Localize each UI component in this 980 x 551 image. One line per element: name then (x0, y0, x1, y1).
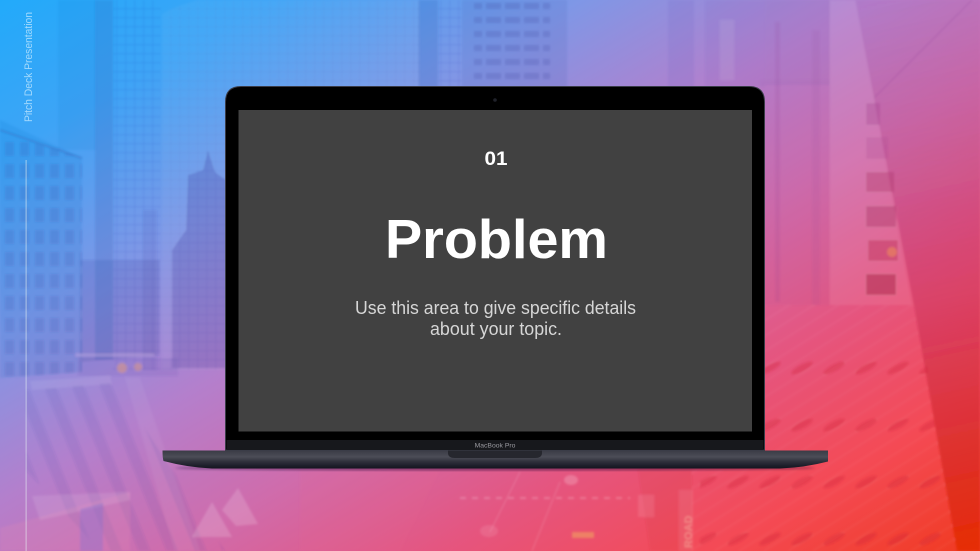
vertical rule (26, 160, 27, 551)
description: about your topic. (430, 318, 562, 339)
side label: Pitch Deck Presentation (23, 12, 35, 122)
lower left diagonal roof (26, 378, 225, 551)
description (355, 297, 636, 339)
dark silhouette tower (172, 150, 226, 368)
low street block (30, 354, 178, 390)
laptop lid (226, 86, 764, 450)
right diagonal panel (855, 0, 980, 551)
laptop (162, 86, 828, 471)
left building (0, 120, 82, 378)
section number: 01 (484, 149, 508, 170)
webcam (493, 98, 497, 102)
laptop shadow (175, 465, 815, 471)
rooftops (192, 488, 258, 537)
centre top building (462, 0, 567, 87)
laptop screen (238, 110, 752, 432)
right pale tower (830, 0, 912, 305)
lower bezel (226, 440, 764, 450)
left tower (58, 0, 160, 362)
street scene (300, 470, 695, 551)
street scene: ROAD (683, 516, 695, 548)
lower left low building (0, 492, 130, 551)
glass tower (113, 0, 420, 370)
laptop base (162, 450, 828, 468)
heading: Problem (385, 208, 608, 270)
building roof slashes (692, 305, 957, 551)
right tower column (668, 0, 830, 305)
model label: MacBook Pro (475, 443, 516, 450)
trackpad notch (448, 450, 542, 458)
description: Use this area to give specific details (355, 297, 636, 318)
centre top glass strip (418, 0, 462, 87)
